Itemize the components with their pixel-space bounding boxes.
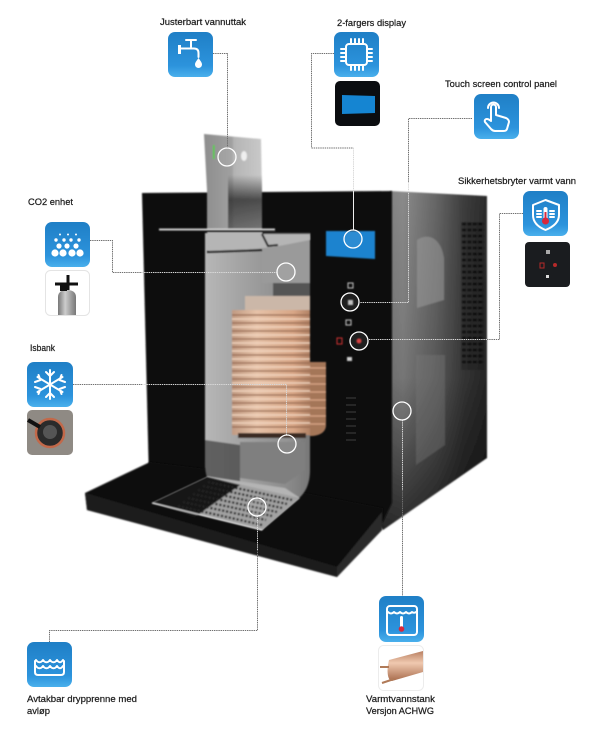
- chrome backsplash with copper coil: [152, 233, 326, 530]
- label: Sikkerhetsbryter varmt vann: Sikkerhetsbryter varmt vann: [458, 176, 576, 187]
- label: Avtakbar drypprenne med avløp: [27, 694, 137, 717]
- thumbnail: CO2 cylinder: [46, 270, 90, 316]
- blue display: [326, 231, 375, 259]
- coil behind panel: [310, 362, 326, 436]
- label: CO2 enhet: CO2 enhet: [28, 197, 73, 208]
- label: 2-fargers display: 2-fargers display: [337, 18, 406, 29]
- callout rings: [218, 148, 411, 516]
- label: Isbank: Isbank: [30, 343, 55, 354]
- machine front panel: [142, 191, 392, 522]
- label: Touch screen control panel: Touch screen control panel: [445, 79, 557, 90]
- label: Varmtvannstank Versjon ACHWG: [366, 694, 435, 717]
- icon: hot water tank: [379, 596, 424, 642]
- thumbnail: copper tank: [378, 646, 424, 690]
- label: Avtakbar drypprenne med avløp: avløp: [27, 706, 50, 717]
- label: Varmtvannstank Versjon ACHWG: Varmtvannstank: [366, 694, 435, 705]
- machine side panel: [375, 191, 487, 530]
- label: Justerbart vannuttak: Justerbart vannuttak: [160, 17, 246, 28]
- label: Varmtvannstank Versjon ACHWG: Versjon ACHWG: [366, 706, 434, 717]
- icon: CO2 bubbles: [45, 222, 90, 267]
- icon: safety shield thermometer: [523, 191, 568, 236]
- icon: touch hand: [474, 94, 519, 139]
- base drip tray: [85, 462, 383, 577]
- thumbnail: ice bank: [27, 410, 73, 455]
- thumbnail: safety switch: [525, 242, 570, 287]
- label: Avtakbar drypprenne med avløp: Avtakbar drypprenne med: [27, 694, 137, 705]
- drip grille: [152, 477, 300, 530]
- icon: water tap: [168, 32, 213, 77]
- spout tower: [159, 134, 310, 253]
- icon: snowflake: [27, 362, 73, 407]
- icon: drip tray water: [27, 642, 72, 687]
- control panel buttons: [337, 283, 362, 361]
- front vents: [346, 398, 356, 440]
- leader lines: [50, 54, 523, 642]
- icon: chip: [334, 32, 379, 77]
- thumbnail: display: [335, 81, 380, 126]
- water cooler machine: [85, 134, 487, 577]
